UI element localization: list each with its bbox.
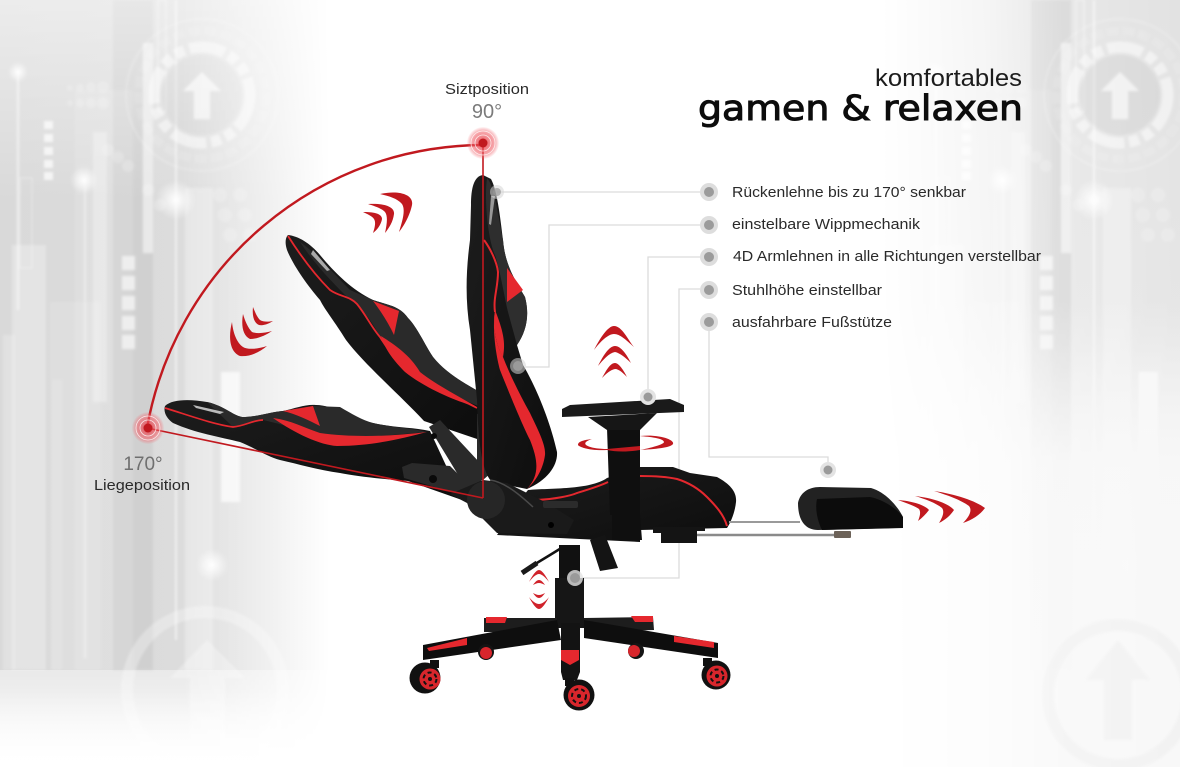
leader lines connecting features to chair — [497, 192, 828, 578]
wheel: centre front — [564, 678, 594, 710]
arrow: backrest motion lower — [230, 307, 273, 356]
feature: armrests: 4D Armlehnen in alle Richtungen verstellbar — [733, 248, 1041, 265]
chair: reclining brackets — [402, 407, 500, 497]
callout dot: footrest — [820, 462, 836, 478]
wheel: front left — [410, 660, 440, 694]
chair: gas lift, tilt knob and five-star base — [410, 535, 730, 710]
chair: tilt mechanism and lever — [450, 480, 578, 573]
label: Sitzposition 90 degrees — [445, 81, 529, 123]
chair: footrest on telescopic rails — [653, 487, 903, 543]
chair: upright backrest at 90 degrees — [467, 175, 557, 489]
background: right tech skyline pattern — [972, 0, 1180, 767]
arrow: armrest height up — [594, 326, 634, 378]
chair: middle backrest position — [286, 235, 480, 440]
target marker: 170 degrees — [132, 412, 164, 444]
label: Sitzposition 90 degrees: 90° — [472, 101, 502, 123]
feature list — [700, 183, 1041, 331]
feature: backrest: Rückenlehne bis zu 170° senkbar — [732, 184, 966, 201]
chair: 4D armrest — [562, 399, 684, 540]
label: Liegeposition 170 degrees: 170° — [123, 454, 163, 475]
label: Sitzposition 90 degrees: Siztposition — [445, 81, 529, 98]
arrow: seat height up and down — [529, 570, 549, 609]
background: left tech skyline pattern — [0, 0, 294, 716]
callout dot: headrest — [490, 185, 504, 199]
arrow: armrest rotation, front part — [578, 439, 640, 452]
chair: seat cushion with red piping — [497, 467, 736, 542]
wheel: front right — [702, 658, 730, 690]
feature: footrest: ausfahrbare Fußstütze — [732, 314, 892, 331]
title: gamen & relaxen — [698, 89, 1023, 129]
feature: rocker: einstelbare Wippmechanik — [732, 216, 921, 233]
title: komfortables — [875, 65, 1022, 92]
arrow: footrest extends — [898, 491, 985, 523]
arrow: backrest motion upper — [363, 192, 412, 233]
label: Liegeposition 170 degrees — [94, 454, 190, 494]
chair: reclined backrest at 170 degrees — [164, 400, 462, 500]
title — [698, 65, 1023, 129]
label: Liegeposition 170 degrees: Liegeposition — [94, 477, 190, 494]
target marker: 90 degrees — [467, 127, 499, 159]
feature: height: Stuhlhöhe einstellbar — [732, 282, 882, 299]
wheel: back right — [628, 643, 644, 659]
wheel: back left — [478, 644, 494, 660]
callout dot: backrest — [510, 358, 526, 374]
arrow: armrest rotation, back part — [640, 436, 673, 450]
reclining range: red arc and angle lines — [147, 145, 483, 498]
callout dot: gas lift — [567, 570, 583, 586]
callout dot: armrest — [640, 389, 656, 405]
